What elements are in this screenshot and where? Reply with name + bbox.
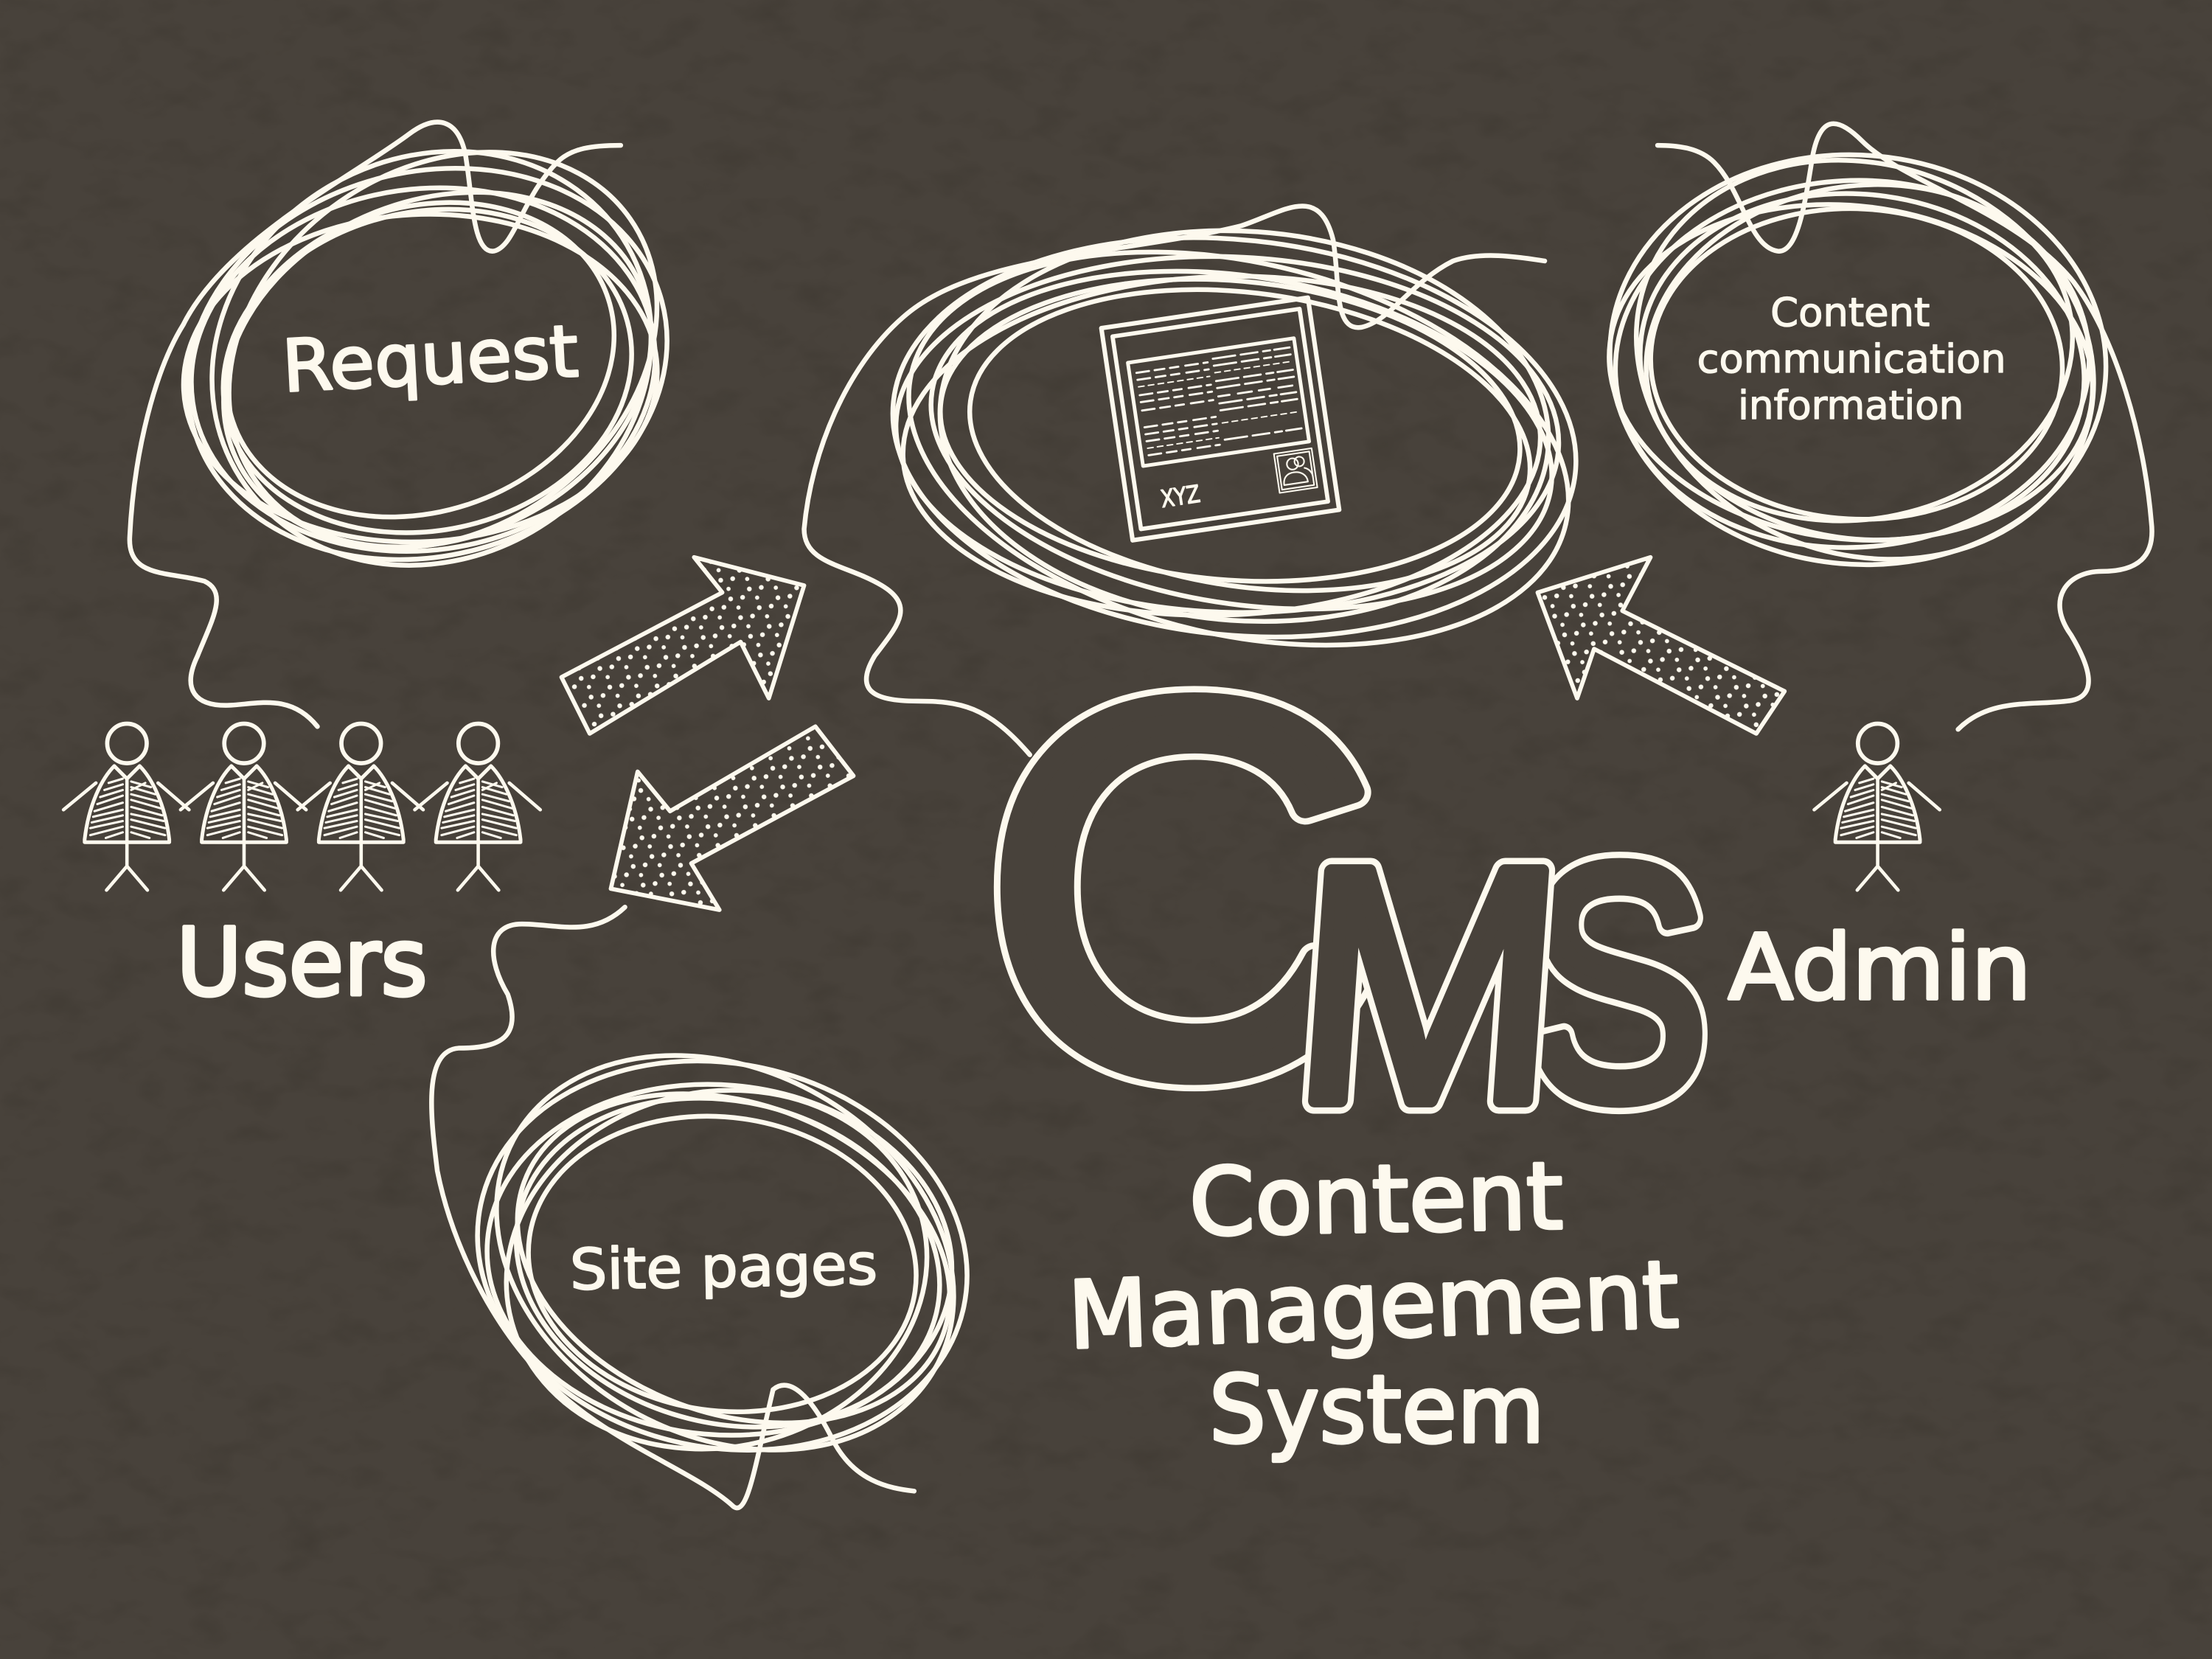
scribble ring: cms <box>869 192 1607 706</box>
users group <box>63 724 540 890</box>
admin figure <box>1814 724 1940 890</box>
document text lines <box>1136 347 1302 455</box>
scribble ring: site pages <box>427 978 1023 1527</box>
arrow: users to cms <box>561 557 804 734</box>
panel: admin bubble <box>1579 97 2152 729</box>
title: content management system <box>1066 1142 1680 1464</box>
label: request: Request <box>280 310 580 409</box>
label: users: Users <box>176 908 428 1017</box>
portrait icon <box>1274 448 1318 493</box>
label: site pages: Site pages <box>569 1232 878 1303</box>
title: content management system: Content <box>1189 1142 1564 1257</box>
title: content management system: Management <box>1066 1240 1680 1370</box>
letter s: S <box>1527 797 1709 1169</box>
head outline: users <box>130 122 621 726</box>
label: content communication information <box>1697 289 2006 428</box>
title: content management system: System <box>1209 1355 1545 1464</box>
label: content communication information: information <box>1738 382 1964 428</box>
panel: site pages bubble <box>427 907 1023 1527</box>
scribble ring: request <box>136 71 734 644</box>
head outline: site pages <box>431 907 914 1508</box>
label: admin: Admin <box>1728 915 2031 1020</box>
head outline: admin <box>1658 124 2152 729</box>
label: content communication information: communication <box>1697 335 2006 382</box>
label: content communication information: Content <box>1770 289 1930 335</box>
panel: cms document bubble <box>804 192 1607 755</box>
scribble ring: admin <box>1579 97 2150 622</box>
arrow: cms to site pages <box>611 726 854 910</box>
letter c: C <box>984 594 1378 1180</box>
label: xyz: XYZ <box>1159 480 1202 513</box>
arrow: admin to cms <box>1537 557 1784 734</box>
panel: request bubble <box>130 71 734 726</box>
document icon <box>1102 298 1339 540</box>
letter s: S <box>1527 797 1709 1169</box>
letter m: M <box>1284 800 1573 1172</box>
cms logotype <box>984 594 1709 1180</box>
letter m: M <box>1284 800 1573 1172</box>
letter c: C <box>984 594 1378 1180</box>
head outline: cms <box>804 206 1545 755</box>
